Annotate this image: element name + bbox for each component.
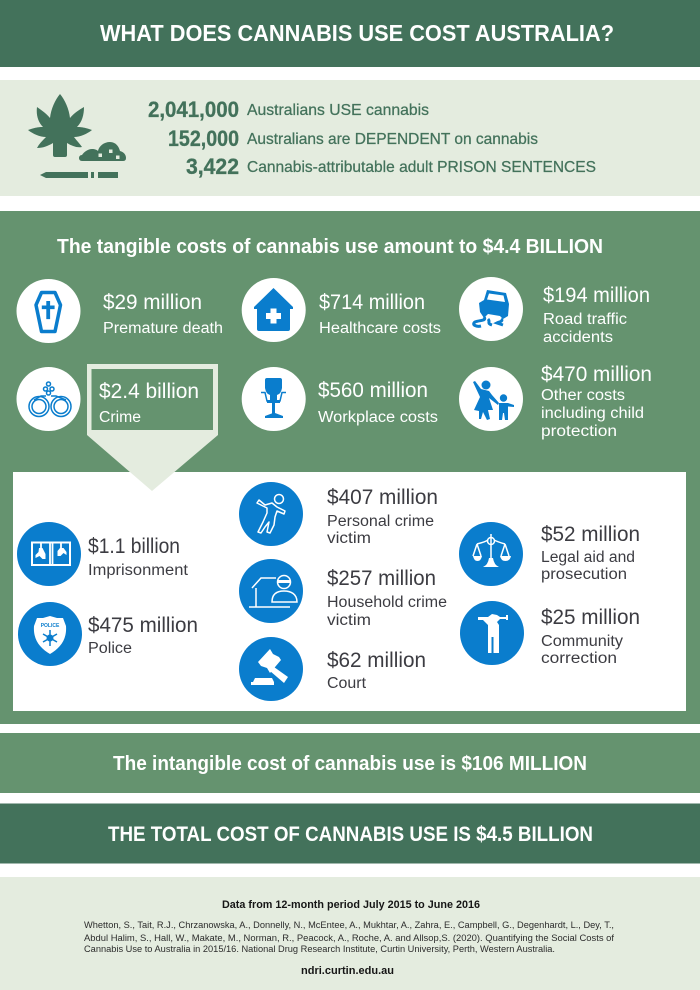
item: imprisonment: $1.1 billion: [88, 535, 180, 558]
panel: tangible costs: [0, 211, 700, 724]
callout: crime box and arrow: $2.4 billion: [99, 380, 199, 403]
item: workplace costs: Workplace costs: [318, 409, 438, 426]
title banner: WHAT DOES CANNABIS USE COST AUSTRALIA?: [100, 20, 614, 46]
citation: Abdul Halim, S., Hall, W., Makate, M., Norman, R., Peacock, A., Roche, A. and Allsop,S. (2020). Quantifying the Social Costs of: [84, 933, 615, 943]
stat: users: Australians USE cannabis: [247, 102, 429, 119]
item: personal crime victim: Personal crime: [327, 513, 434, 530]
callout: crime box and arrow: [87, 364, 218, 491]
stat: dependent: Australians are DEPENDENT on cannabis: [247, 131, 538, 148]
website: ndri.curtin.edu.au: [301, 965, 394, 977]
item: police: Police: [88, 640, 132, 657]
item: road traffic accidents: $194 million: [543, 284, 650, 307]
item: healthcare costs: $714 million: [319, 291, 425, 314]
item: personal crime victim: $407 million: [327, 486, 438, 509]
item: premature death: [16, 279, 223, 343]
icon: cannabis leaf and joint: [28, 94, 126, 178]
item: other costs: $470 million: [541, 363, 652, 386]
item: household crime victim: [239, 559, 447, 629]
item: court: Court: [327, 675, 367, 692]
item: legal aid and prosecution: $52 million: [541, 523, 640, 546]
item: community correction: correction: [541, 650, 617, 667]
stat: users: [148, 97, 429, 122]
item: crime: [16, 367, 80, 431]
item: other costs: including child: [541, 405, 644, 422]
stat: prison sentences: Cannabis-attributable adult PRISON SENTENCES: [247, 159, 596, 176]
panel: sources footer: [0, 877, 700, 990]
item: personal crime victim: victim: [327, 530, 371, 547]
item: imprisonment: [17, 522, 189, 586]
item: other costs: Other costs: [541, 387, 625, 404]
banner: total cost: [0, 804, 700, 864]
citation: [84, 920, 615, 954]
item: workplace costs: [242, 367, 438, 431]
item: police: POLICE: [41, 623, 60, 629]
item: legal aid and prosecution: prosecution: [541, 566, 627, 583]
item: imprisonment: Imprisonment: [88, 562, 189, 579]
item: community correction: [460, 601, 640, 667]
item: road traffic accidents: Road traffic: [543, 311, 627, 328]
item: court: [239, 637, 426, 701]
item: other costs: [459, 363, 652, 440]
item: premature death: $29 million: [103, 291, 202, 314]
item: road traffic accidents: accidents: [543, 329, 613, 346]
item: household crime victim: victim: [327, 612, 371, 629]
panel: crime details: [13, 364, 686, 711]
stat: dependent: 152,000: [168, 126, 239, 151]
citation: Cannabis Use to Australia in 2015/16. National Drug Research Institute, Curtin University, Perth, Western Australia.: [84, 944, 555, 954]
item: community correction: Community: [541, 633, 623, 650]
item: personal crime victim: [239, 482, 438, 547]
stat: users: 2,041,000: [148, 97, 239, 122]
item: legal aid and prosecution: [459, 522, 640, 586]
stat: prison sentences: [186, 154, 596, 179]
item: household crime victim: $257 million: [327, 567, 436, 590]
item: police: $475 million: [88, 614, 198, 637]
data period note: Data from 12-month period July 2015 to June 2016: [222, 899, 480, 911]
item: police: [18, 602, 198, 666]
citation: Whetton, S., Tait, R.J., Chrzanowska, A., Donnelly, N., McEntee, A., Mukhtar, A., Zahra, E., Campbell, G., Degenhardt, L., Dey, T.,: [84, 920, 614, 930]
item: workplace costs: $560 million: [318, 379, 428, 402]
stat: prison sentences: 3,422: [186, 154, 239, 179]
item: legal aid and prosecution: Legal aid and: [541, 549, 635, 566]
banner: intangible cost: The intangible cost of cannabis use is $106 MILLION: [113, 753, 587, 775]
item: healthcare costs: Healthcare costs: [319, 320, 441, 337]
item: other costs: protection: [541, 423, 617, 440]
title banner: [0, 0, 700, 67]
item: road traffic accidents: [459, 277, 650, 346]
stat: dependent: [168, 126, 538, 151]
banner: intangible cost: [0, 733, 700, 793]
banner: total cost: THE TOTAL COST OF CANNABIS USE IS $4.5 BILLION: [108, 823, 593, 846]
callout: crime box and arrow: Crime: [99, 409, 141, 426]
item: household crime victim: Household crime: [327, 594, 447, 611]
item: court: $62 million: [327, 649, 426, 672]
panel: usage statistics: [0, 80, 700, 196]
item: premature death: Premature death: [103, 320, 223, 337]
item: community correction: $25 million: [541, 606, 640, 629]
item: healthcare costs: [242, 278, 441, 342]
heading: tangible costs: The tangible costs of cannabis use amount to $4.4 BILLION: [57, 236, 603, 258]
